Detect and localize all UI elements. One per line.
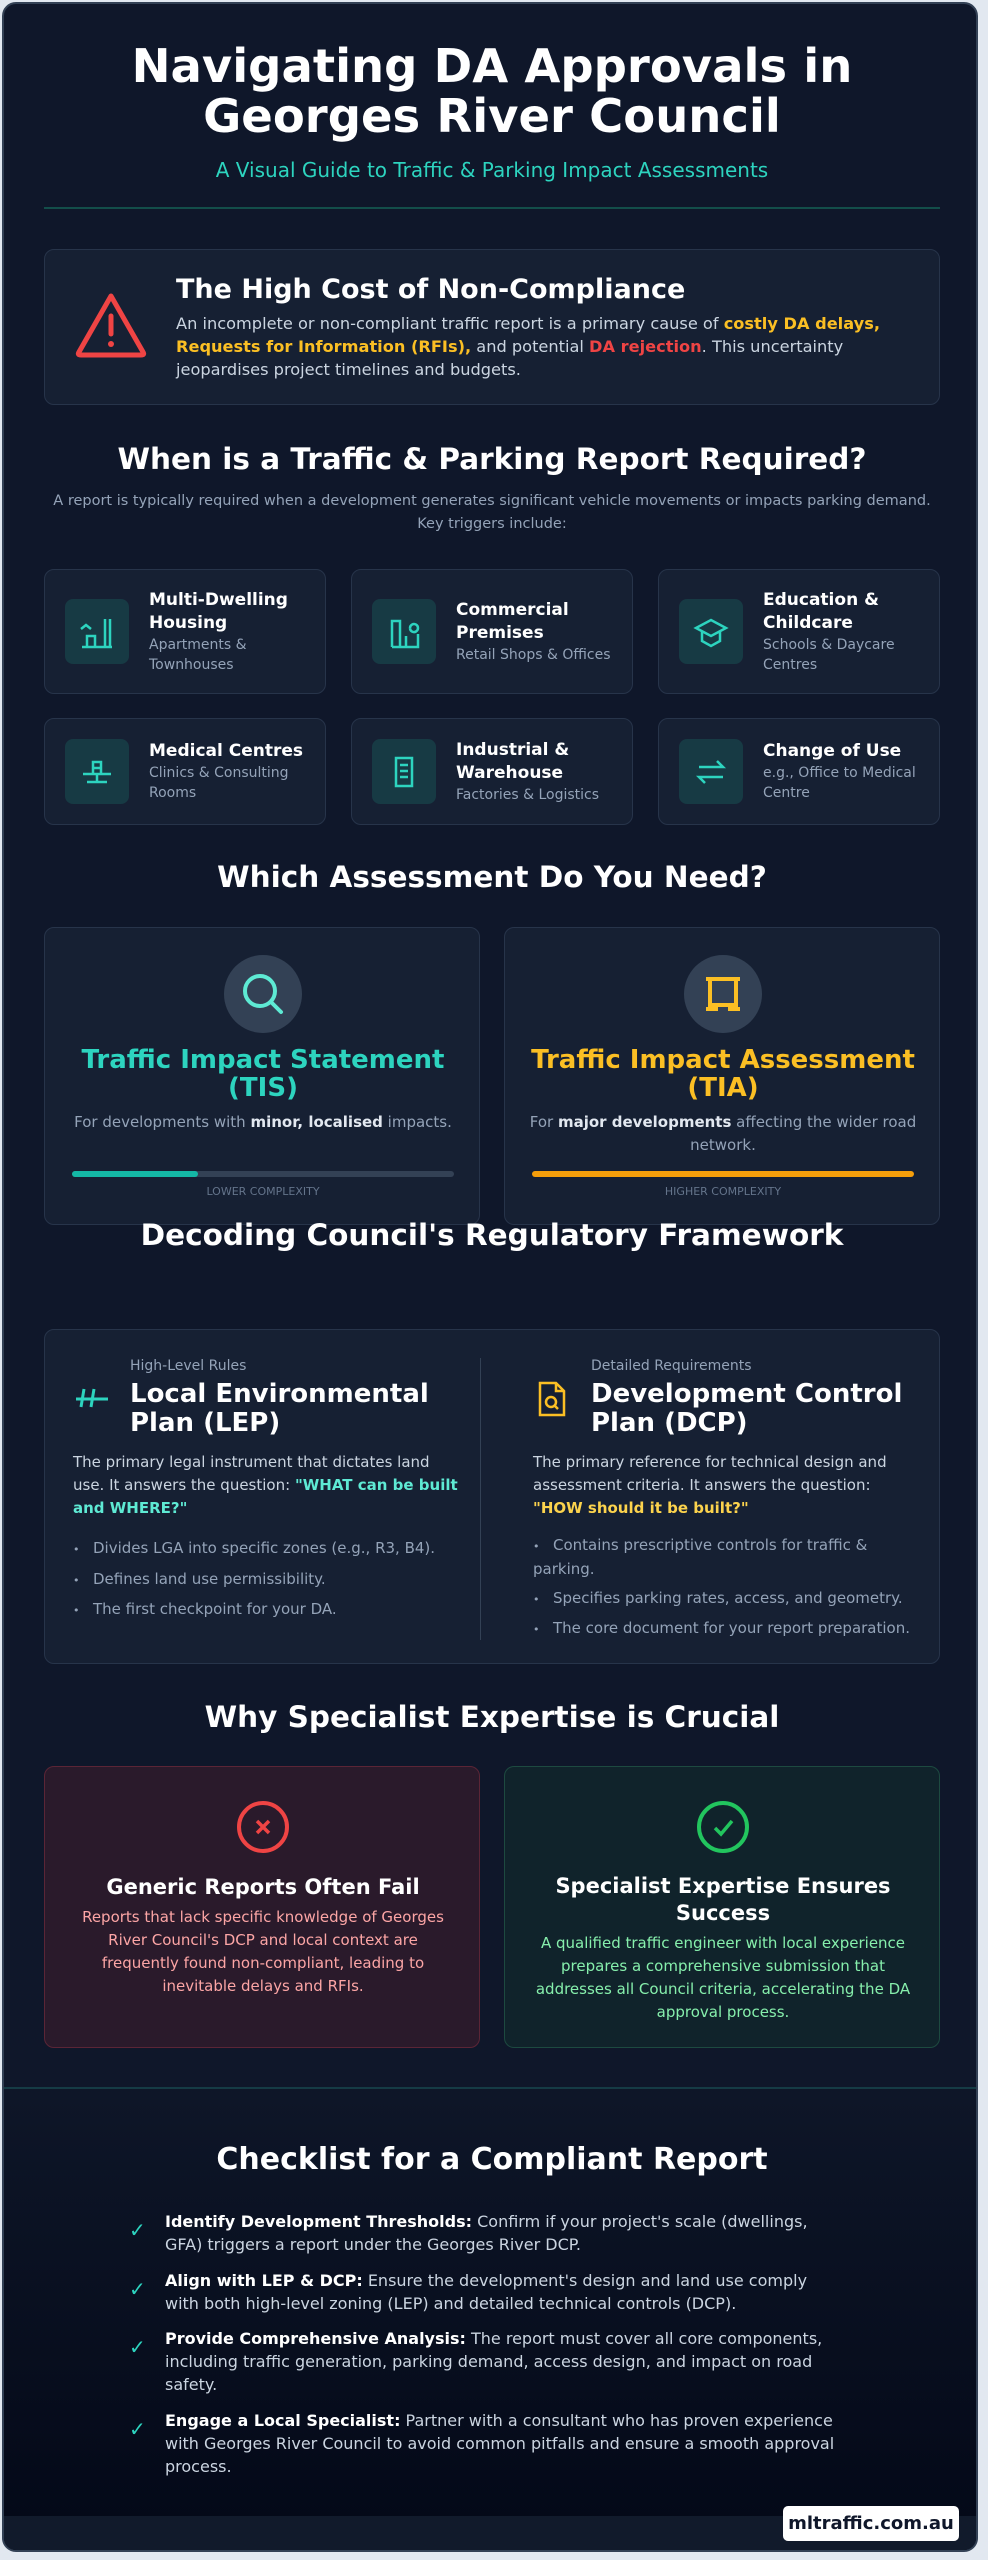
heading: (TIA) [687, 1073, 759, 1103]
bullets: Contains prescriptive controls for traffic & parking. [533, 1536, 867, 1578]
text block: An incomplete or non-compliant traffic report is a primary cause of costly DA delays, Requests for Information (RFIs), and potential DA rejection. This uncertainty jeopardises project timelines and budgets. [176, 314, 880, 379]
icon: warehouse [372, 739, 436, 804]
panel: education: Childcare [763, 612, 853, 632]
heading: Checklist for a Compliant Report [216, 2142, 768, 2177]
column: DCP [532, 1358, 910, 1637]
checklist section [4, 2087, 980, 2554]
bar: lower complexity [72, 1171, 454, 1177]
icon: housing [65, 599, 129, 664]
panel: TIA: HIGHER COMPLEXITY [665, 1185, 781, 1198]
subtitle: A Visual Guide to Traffic & Parking Impact Assessments [216, 158, 768, 182]
icon: check [697, 1801, 749, 1853]
bullets [533, 1536, 910, 1637]
checklist items: Identify Development Thresholds: Confirm if your project's scale (dwellings, GFA) triggers a report under the Georges River DCP. [165, 2212, 808, 2254]
bullets: The core document for your report preparation. [553, 1619, 910, 1637]
panel: commercial [351, 569, 633, 694]
bullets: Specifies parking rates, access, and geometry. [553, 1589, 903, 1607]
heading: framework: Decoding Council's Regulatory Framework [141, 1218, 843, 1252]
heading: why specialist: Why Specialist Expertise is Crucial [205, 1700, 779, 1734]
heading: (TIS) [228, 1073, 298, 1103]
panel: multi-dwelling: Multi-Dwelling [149, 590, 288, 610]
heading: which assessment: Which Assessment Do You Need? [217, 860, 767, 894]
heading: Specialist Expertise Ensures [555, 1874, 891, 1898]
icon: cart [684, 955, 762, 1033]
bullets [74, 1539, 435, 1618]
heading: Plan (DCP) [591, 1408, 748, 1438]
heading [555, 1874, 891, 1925]
footer badge [783, 2506, 959, 2541]
panel: high cost of non-compliance [44, 249, 940, 405]
column: LEP: High-Level Rules [130, 1358, 246, 1374]
icon: graduation cap [679, 599, 743, 664]
icon: magnifier [224, 955, 302, 1033]
text: For major developments affecting the wider road network. [530, 1113, 916, 1154]
panel: industrial: Warehouse [456, 762, 563, 782]
heading: Local Environmental [130, 1379, 429, 1409]
panel: change of use [658, 718, 940, 825]
panel: change of use: e.g., Office to Medical [763, 765, 916, 781]
bullets: Divides LGA into specific zones (e.g., R3, B4). [93, 1539, 435, 1557]
icon: zoning [76, 1388, 108, 1408]
heading [591, 1379, 902, 1438]
checklist items: ✓ [129, 2335, 146, 2359]
checklist items: Provide Comprehensive Analysis: The report must cover all core components, including traffic generation, parking demand, access design, and impact on road safety. [165, 2329, 822, 2394]
panel: industrial: Industrial & [456, 740, 569, 760]
icon: medical [65, 739, 129, 804]
panel: industrial: Factories & Logistics [456, 786, 599, 802]
checklist items: Align with LEP & DCP: Ensure the development's design and land use comply with both high-level zoning (LEP) and detailed technical controls (DCP). [165, 2271, 807, 2313]
footer badge: mltraffic.com.au [788, 2513, 954, 2534]
heading: Traffic Impact Assessment [531, 1045, 915, 1075]
heading: The High Cost of Non-Compliance [176, 274, 685, 305]
heading: Success [676, 1901, 770, 1925]
panel: industrial [351, 718, 633, 825]
panel: education: Centres [763, 656, 817, 672]
text: The primary legal instrument that dictates land use. It answers the question: "WHAT can be built and WHERE?" [73, 1453, 458, 1517]
heading: Generic Reports Often Fail [106, 1875, 420, 1899]
checklist items: ✓ [129, 2277, 146, 2301]
panel: change of use: Centre [763, 785, 810, 801]
icon: warning triangle [76, 294, 146, 358]
heading: Plan (LEP) [130, 1408, 280, 1438]
icon: shop [372, 599, 436, 664]
panel: framework [44, 1329, 940, 1664]
panel: generic reports fail [44, 1766, 480, 2048]
title: Navigating DA Approvals in [132, 39, 852, 93]
heading [82, 1045, 444, 1103]
panel: medical [44, 718, 326, 825]
checklist items: ✓ [129, 2417, 146, 2441]
panel: TIS: LOWER COMPLEXITY [206, 1185, 320, 1198]
panel: multi-dwelling: Housing [149, 612, 227, 632]
text: For developments with minor, localised impacts. [74, 1113, 452, 1131]
heading: Development Control [591, 1379, 902, 1409]
panel: TIA [504, 927, 940, 1225]
panel: change of use: Change of Use [763, 741, 901, 761]
column: DCP: Detailed Requirements [591, 1358, 752, 1374]
panel: TIS [44, 927, 480, 1225]
panel: commercial: Premises [456, 622, 544, 642]
title [132, 39, 852, 143]
heading: when required: When is a Traffic & Parking Report Required? [117, 442, 867, 476]
panel: education: Schools & Daycare [763, 636, 895, 652]
icon: document search [538, 1382, 566, 1416]
bullets: Defines land use permissibility. [93, 1570, 326, 1588]
panel: specialist success [504, 1766, 940, 2048]
column: LEP [72, 1358, 458, 1618]
panel: medical: Clinics & Consulting [149, 765, 289, 781]
text: A qualified traffic engineer with local experience prepares a comprehensive submission that addresses all Council criteria, accelerating the DA approval process. [536, 1934, 910, 2021]
heading [130, 1379, 429, 1438]
panel: commercial: Retail Shops & Offices [456, 646, 610, 662]
panel: education [658, 569, 940, 694]
text: The primary reference for technical design and assessment criteria. It answers the question: "HOW should it be built?" [533, 1453, 887, 1517]
heading [531, 1045, 915, 1103]
bar: higher complexity [532, 1171, 914, 1177]
text block: intro: A report is typically required when a development generates significant vehicle movements or impacts parking demand. Key triggers include: [53, 493, 931, 532]
bullets: The first checkpoint for your DA. [93, 1600, 337, 1618]
panel: medical: Medical Centres [149, 741, 303, 761]
checklist items [129, 2212, 834, 2476]
checklist items: Engage a Local Specialist: Partner with a consultant who has proven experience with Georges River Council to avoid common pitfalls and ensure a smooth approval process. [165, 2411, 834, 2476]
panel: multi-dwelling: Townhouses [149, 656, 234, 672]
panel: medical: Rooms [149, 785, 196, 801]
panel: education: Education & [763, 590, 879, 610]
panel: multi-dwelling: Apartments & [149, 636, 247, 652]
title: Georges River Council [203, 89, 781, 143]
panel: multi-dwelling [44, 569, 326, 694]
heading: Traffic Impact Statement [82, 1045, 444, 1075]
icon: arrows [679, 739, 743, 804]
panel: commercial: Commercial [456, 600, 569, 620]
text: Reports that lack specific knowledge of Georges River Council's DCP and local context are frequently found non-compliant, leading to inevitable delays and RFIs. [82, 1908, 444, 1995]
checklist items: ✓ [129, 2218, 146, 2242]
icon: cross [237, 1801, 289, 1853]
